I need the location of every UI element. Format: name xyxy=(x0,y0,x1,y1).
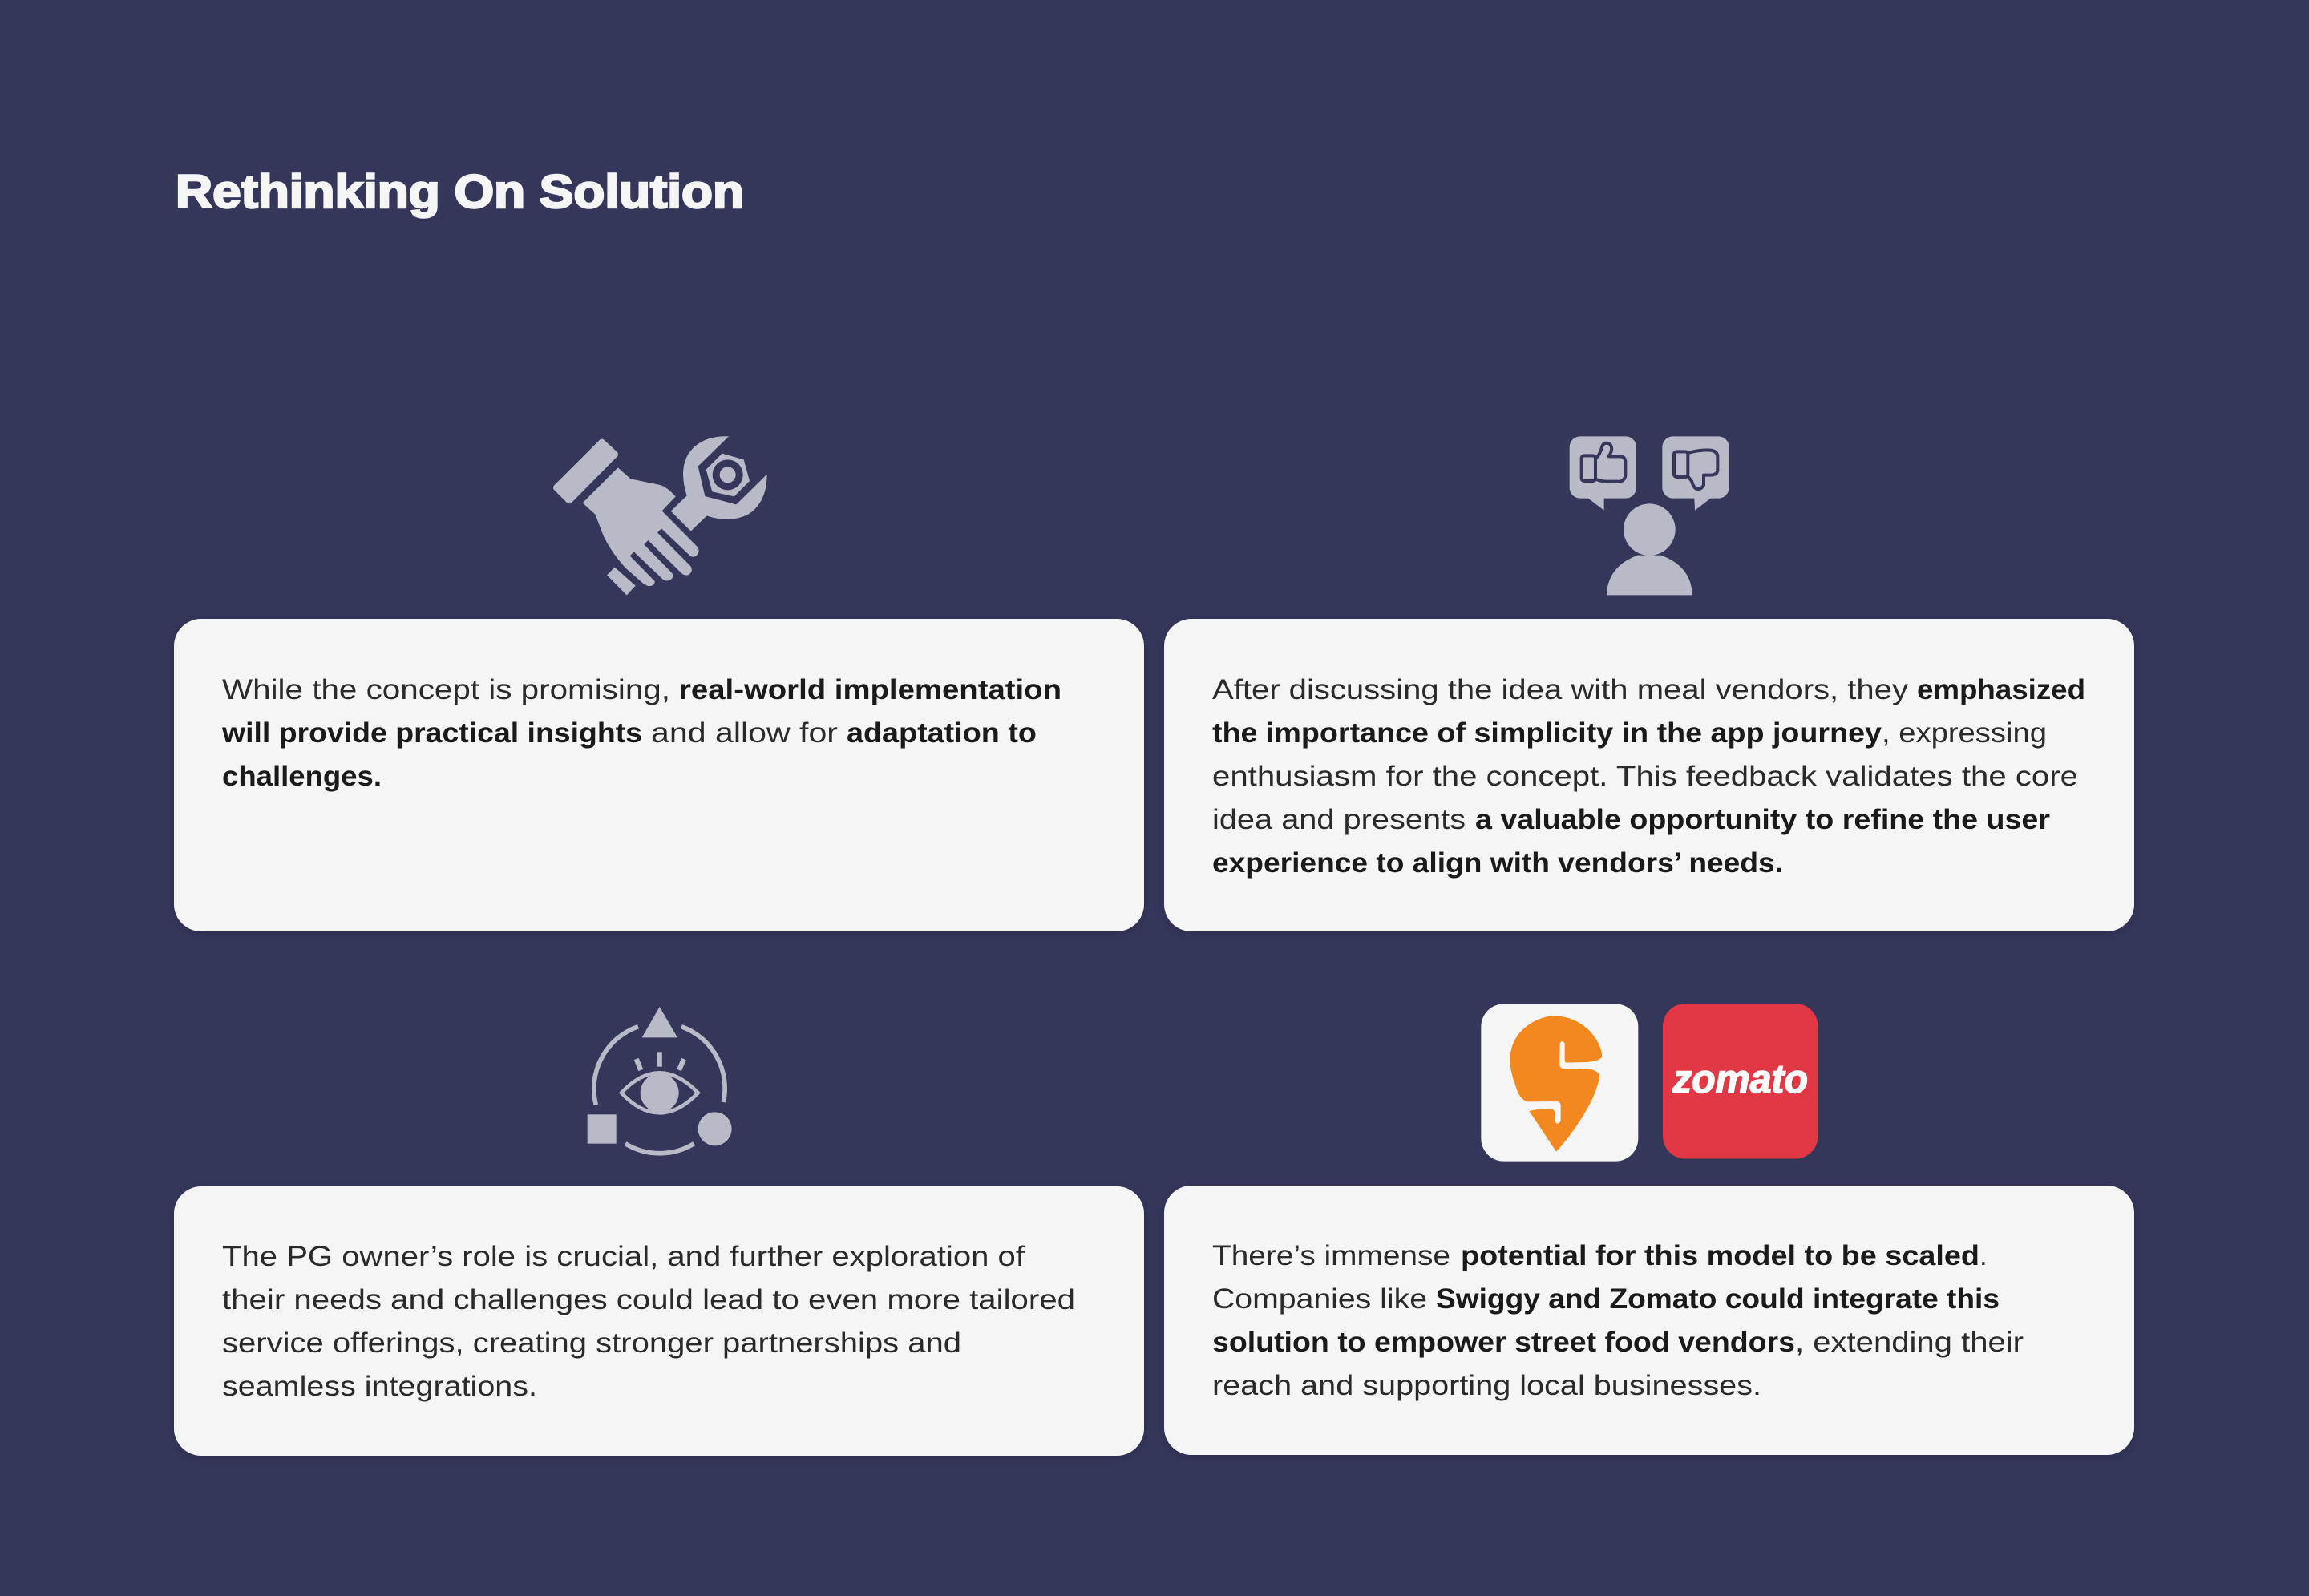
icon: Swiggy logo xyxy=(1481,1004,1638,1162)
panel: vendor feedback: the importance of simplicity in the app journey xyxy=(1212,717,1882,749)
panel: PG owner role: service offerings, creating stronger partnerships and xyxy=(222,1327,961,1359)
panel: real-world implementation: real-world implementation xyxy=(679,674,1061,705)
panel: vendor feedback xyxy=(1164,619,2134,931)
panel: PG owner role: their needs and challenges could lead to even more tailored xyxy=(222,1284,1075,1315)
panel: scaling potential: reach and supporting local businesses. xyxy=(1212,1370,1761,1401)
icon: person with thumbs up and thumbs down xyxy=(1570,436,1729,595)
panel: vendor feedback: a valuable opportunity to refine the user xyxy=(1475,804,2050,835)
panel: vendor feedback: , expressing xyxy=(1882,717,2047,749)
panel: vendor feedback: idea and presents xyxy=(1212,804,1466,835)
panel: vendor feedback: After discussing the idea with meal vendors, they xyxy=(1212,674,1909,705)
panel: real-world implementation xyxy=(174,619,1144,931)
panel: scaling potential: solution to empower street food vendors xyxy=(1212,1327,1795,1358)
panel: real-world implementation: and allow for xyxy=(651,717,838,749)
panel: vendor feedback: experience to align with vendors’ needs. xyxy=(1212,847,1783,879)
icon: hand holding wrench xyxy=(556,436,767,595)
panel: PG owner role: seamless integrations. xyxy=(222,1371,537,1402)
panel: scaling potential: Companies like xyxy=(1212,1283,1427,1315)
panel: PG owner role xyxy=(174,1186,1144,1456)
icon: Zomato logo: zomato xyxy=(1672,1057,1808,1101)
panel: PG owner role: The PG owner’s role is crucial, and further exploration of xyxy=(222,1241,1025,1272)
panel: vendor feedback: emphasized xyxy=(1917,674,2085,705)
panel: scaling potential: There’s immense xyxy=(1212,1240,1450,1271)
title: Rethinking On Solution xyxy=(176,166,744,218)
panel: real-world implementation: adaptation to xyxy=(847,717,1037,749)
panel: scaling potential: . xyxy=(1979,1240,1988,1271)
panel: vendor feedback: enthusiasm for the concept. This feedback validates the core xyxy=(1212,761,2078,792)
panel: scaling potential: potential for this model to be scaled xyxy=(1461,1240,1979,1271)
icon: eye with triangle, square and circle xyxy=(588,1007,732,1154)
panel: scaling potential xyxy=(1164,1186,2134,1455)
panel: scaling potential: Swiggy and Zomato could integrate this xyxy=(1436,1283,2000,1315)
panel: scaling potential: , extending their xyxy=(1795,1327,2024,1358)
panel: real-world implementation: challenges. xyxy=(222,761,382,792)
icon: Zomato logo xyxy=(1663,1004,1818,1159)
panel: real-world implementation: While the concept is promising, xyxy=(222,674,670,705)
panel: real-world implementation: will provide practical insights xyxy=(221,717,642,749)
